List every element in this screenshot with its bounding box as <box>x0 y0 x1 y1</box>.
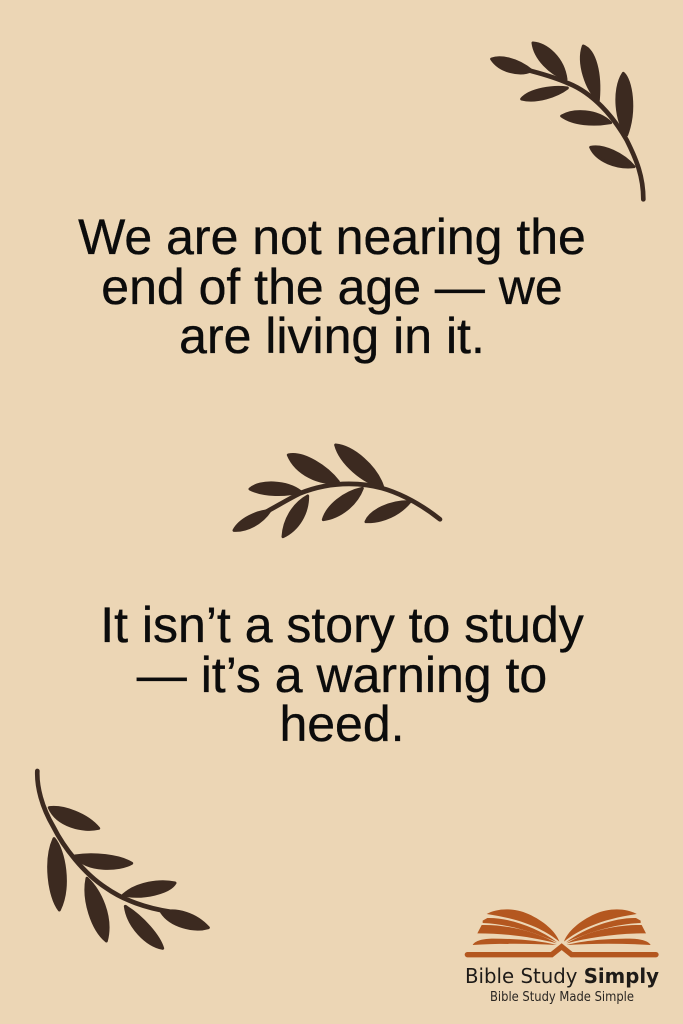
icon: top-right leaf branch <box>492 43 643 199</box>
heading: first statement: We are not nearing the <box>78 209 586 265</box>
logo: Bible Study Simply <box>465 909 659 1005</box>
icon: center leaf branch <box>234 445 440 537</box>
text: second statement <box>100 597 584 752</box>
icon: bottom-left leaf branch <box>37 771 208 948</box>
text: logo tagline: Bible Study Made Simple <box>490 990 634 1005</box>
text: second statement: heed. <box>279 696 405 752</box>
icon: open book <box>467 909 656 955</box>
heading: first statement <box>78 209 586 364</box>
text: second statement: — it’s a warning to <box>137 647 547 703</box>
heading: first statement: are living in it. <box>179 308 485 364</box>
heading: first statement: end of the age — we <box>101 259 563 315</box>
text: logo name: Bible Study Simply <box>465 964 659 988</box>
text: second statement: It isn’t a story to study <box>100 597 584 653</box>
